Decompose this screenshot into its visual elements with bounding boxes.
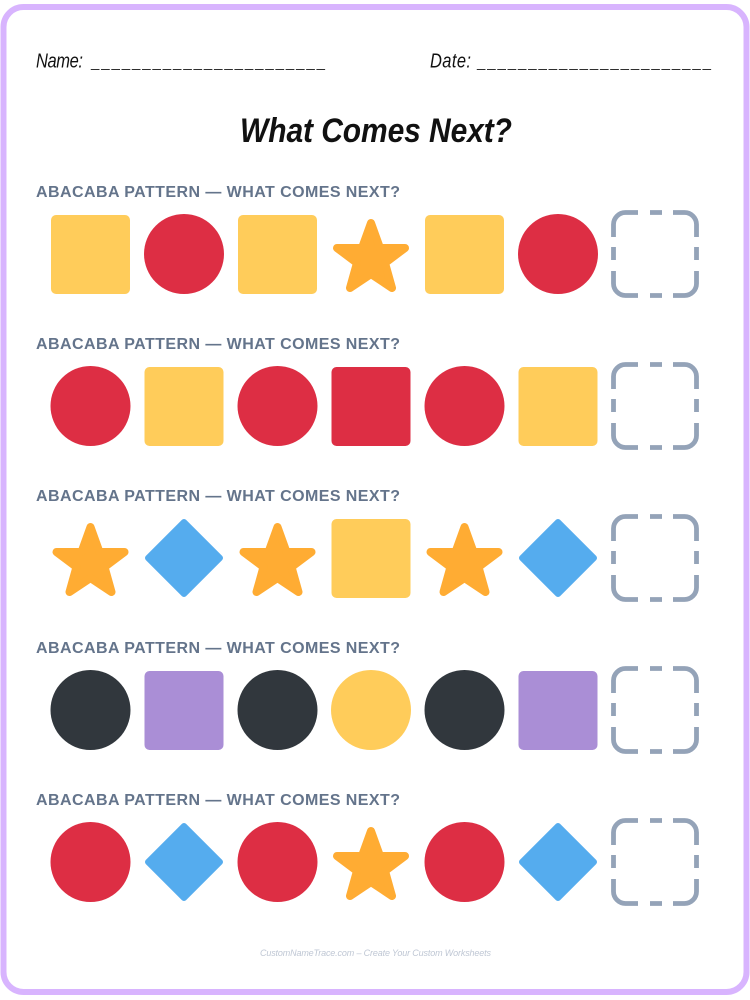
- row 4 shapes: [50, 670, 598, 750]
- date field: _______________________: [476, 54, 712, 71]
- row 2 answer box: [614, 364, 696, 448]
- pattern row 2: [36, 336, 696, 448]
- row 2 heading: ABACABA PATTERN — WHAT COMES NEXT?: [36, 336, 400, 353]
- row 2 shapes: [50, 366, 598, 446]
- pattern row 3: [36, 488, 696, 600]
- name field: Name:: [36, 49, 83, 72]
- row 3 shapes: [56, 519, 594, 598]
- row 1 shapes: [51, 214, 598, 294]
- pattern row 5: [36, 792, 696, 904]
- name field: _______________________: [90, 54, 326, 71]
- row 4 heading: ABACABA PATTERN — WHAT COMES NEXT?: [36, 640, 400, 657]
- row 3 answer box: [614, 516, 696, 600]
- footer: CustomNameTrace.com – Create Your Custom Worksheets: [260, 948, 492, 958]
- row 1 answer box: [614, 212, 696, 296]
- row 1 heading: ABACABA PATTERN — WHAT COMES NEXT?: [36, 184, 400, 201]
- title: What Comes Next?: [240, 111, 512, 149]
- row 5 heading: ABACABA PATTERN — WHAT COMES NEXT?: [36, 792, 400, 809]
- pattern row 4: [36, 640, 696, 752]
- date field: [430, 49, 712, 72]
- name field: [36, 49, 326, 72]
- row 5 shapes: [50, 822, 594, 902]
- pattern row 1: [36, 184, 696, 296]
- row 3 heading: ABACABA PATTERN — WHAT COMES NEXT?: [36, 488, 400, 505]
- date field: Date:: [430, 49, 471, 72]
- row 4 answer box: [614, 668, 696, 752]
- row 5 answer box: [614, 820, 696, 904]
